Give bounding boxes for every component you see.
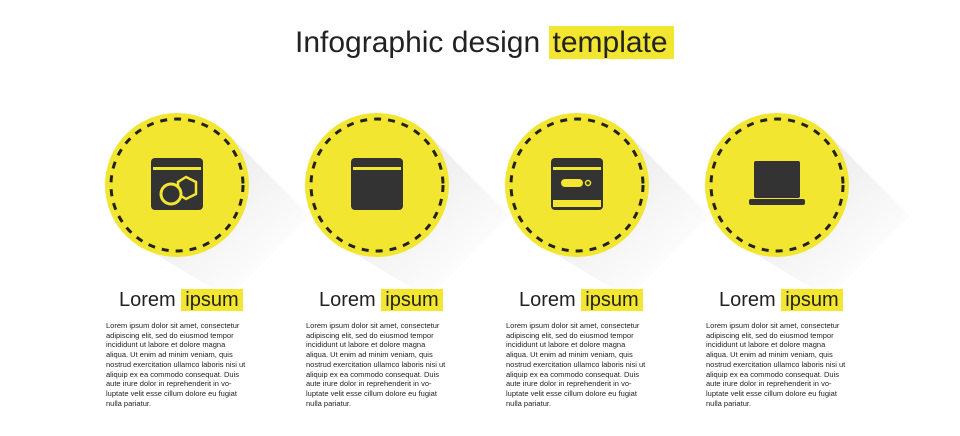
text block: aliquip ex ea commodo consequat. Duis	[706, 370, 839, 379]
text block	[106, 321, 246, 408]
text block: adipiscing elit, sed do eiusmod tempor	[506, 331, 634, 340]
text block: aute irure dolor in reprehenderit in vo-	[306, 379, 432, 388]
panel: item 1	[105, 113, 249, 408]
text block: nostrud exercitation ullamco laboris nisi ut	[106, 360, 245, 369]
text block: nulla pariatur.	[106, 399, 151, 408]
text block: aute irure dolor in reprehenderit in vo-	[706, 379, 832, 388]
panel: item 3	[505, 113, 649, 408]
text block	[306, 321, 446, 408]
text block: luptate velit esse cillum dolore eu fugiat	[306, 389, 437, 398]
text block: Lorem ipsum dolor sit amet, consectetur	[706, 321, 839, 330]
text block: incididunt ut labore et dolore magna	[106, 340, 225, 349]
text block: Lorem ipsum dolor sit amet, consectetur	[106, 321, 239, 330]
heading: Lorem ipsum	[719, 289, 839, 311]
text block: aliqua. Ut enim ad minim veniam, quis	[306, 350, 433, 359]
text block: adipiscing elit, sed do eiusmod tempor	[306, 331, 434, 340]
text block: nostrud exercitation ullamco laboris nisi ut	[506, 360, 645, 369]
text block: luptate velit esse cillum dolore eu fugiat	[706, 389, 837, 398]
text block: luptate velit esse cillum dolore eu fugiat	[506, 389, 637, 398]
heading: Lorem ipsum	[519, 289, 639, 311]
text block: aliqua. Ut enim ad minim veniam, quis	[106, 350, 233, 359]
heading: Lorem ipsum	[119, 289, 239, 311]
text block: aliquip ex ea commodo consequat. Duis	[106, 370, 239, 379]
text block: nulla pariatur.	[506, 399, 551, 408]
text block: nulla pariatur.	[306, 399, 351, 408]
text block: nulla pariatur.	[706, 399, 751, 408]
panel: item 4	[705, 113, 849, 408]
icon: browser search	[505, 113, 649, 257]
text block: incididunt ut labore et dolore magna	[306, 340, 425, 349]
text block: aliquip ex ea commodo consequat. Duis	[306, 370, 439, 379]
icon: browser window	[305, 113, 449, 257]
text block: aliquip ex ea commodo consequat. Duis	[506, 370, 639, 379]
text block: aute irure dolor in reprehenderit in vo-	[506, 379, 632, 388]
text block: luptate velit esse cillum dolore eu fugiat	[106, 389, 237, 398]
text block: Lorem ipsum dolor sit amet, consectetur	[506, 321, 639, 330]
title: Infographic design template	[295, 26, 668, 59]
text block	[506, 321, 646, 408]
text block: incididunt ut labore et dolore magna	[506, 340, 625, 349]
text block: nostrud exercitation ullamco laboris nisi ut	[706, 360, 845, 369]
text block: adipiscing elit, sed do eiusmod tempor	[706, 331, 834, 340]
panel: item 2	[305, 113, 449, 408]
text block: aute irure dolor in reprehenderit in vo-	[106, 379, 232, 388]
icon: laptop	[705, 113, 849, 257]
text block: aliqua. Ut enim ad minim veniam, quis	[506, 350, 633, 359]
text block	[706, 321, 846, 408]
icon: browser with shapes	[105, 113, 249, 257]
text block: adipiscing elit, sed do eiusmod tempor	[106, 331, 234, 340]
text block: aliqua. Ut enim ad minim veniam, quis	[706, 350, 833, 359]
text block: incididunt ut labore et dolore magna	[706, 340, 825, 349]
text block: Lorem ipsum dolor sit amet, consectetur	[306, 321, 439, 330]
heading: Lorem ipsum	[319, 289, 439, 311]
text block: nostrud exercitation ullamco laboris nisi ut	[306, 360, 445, 369]
